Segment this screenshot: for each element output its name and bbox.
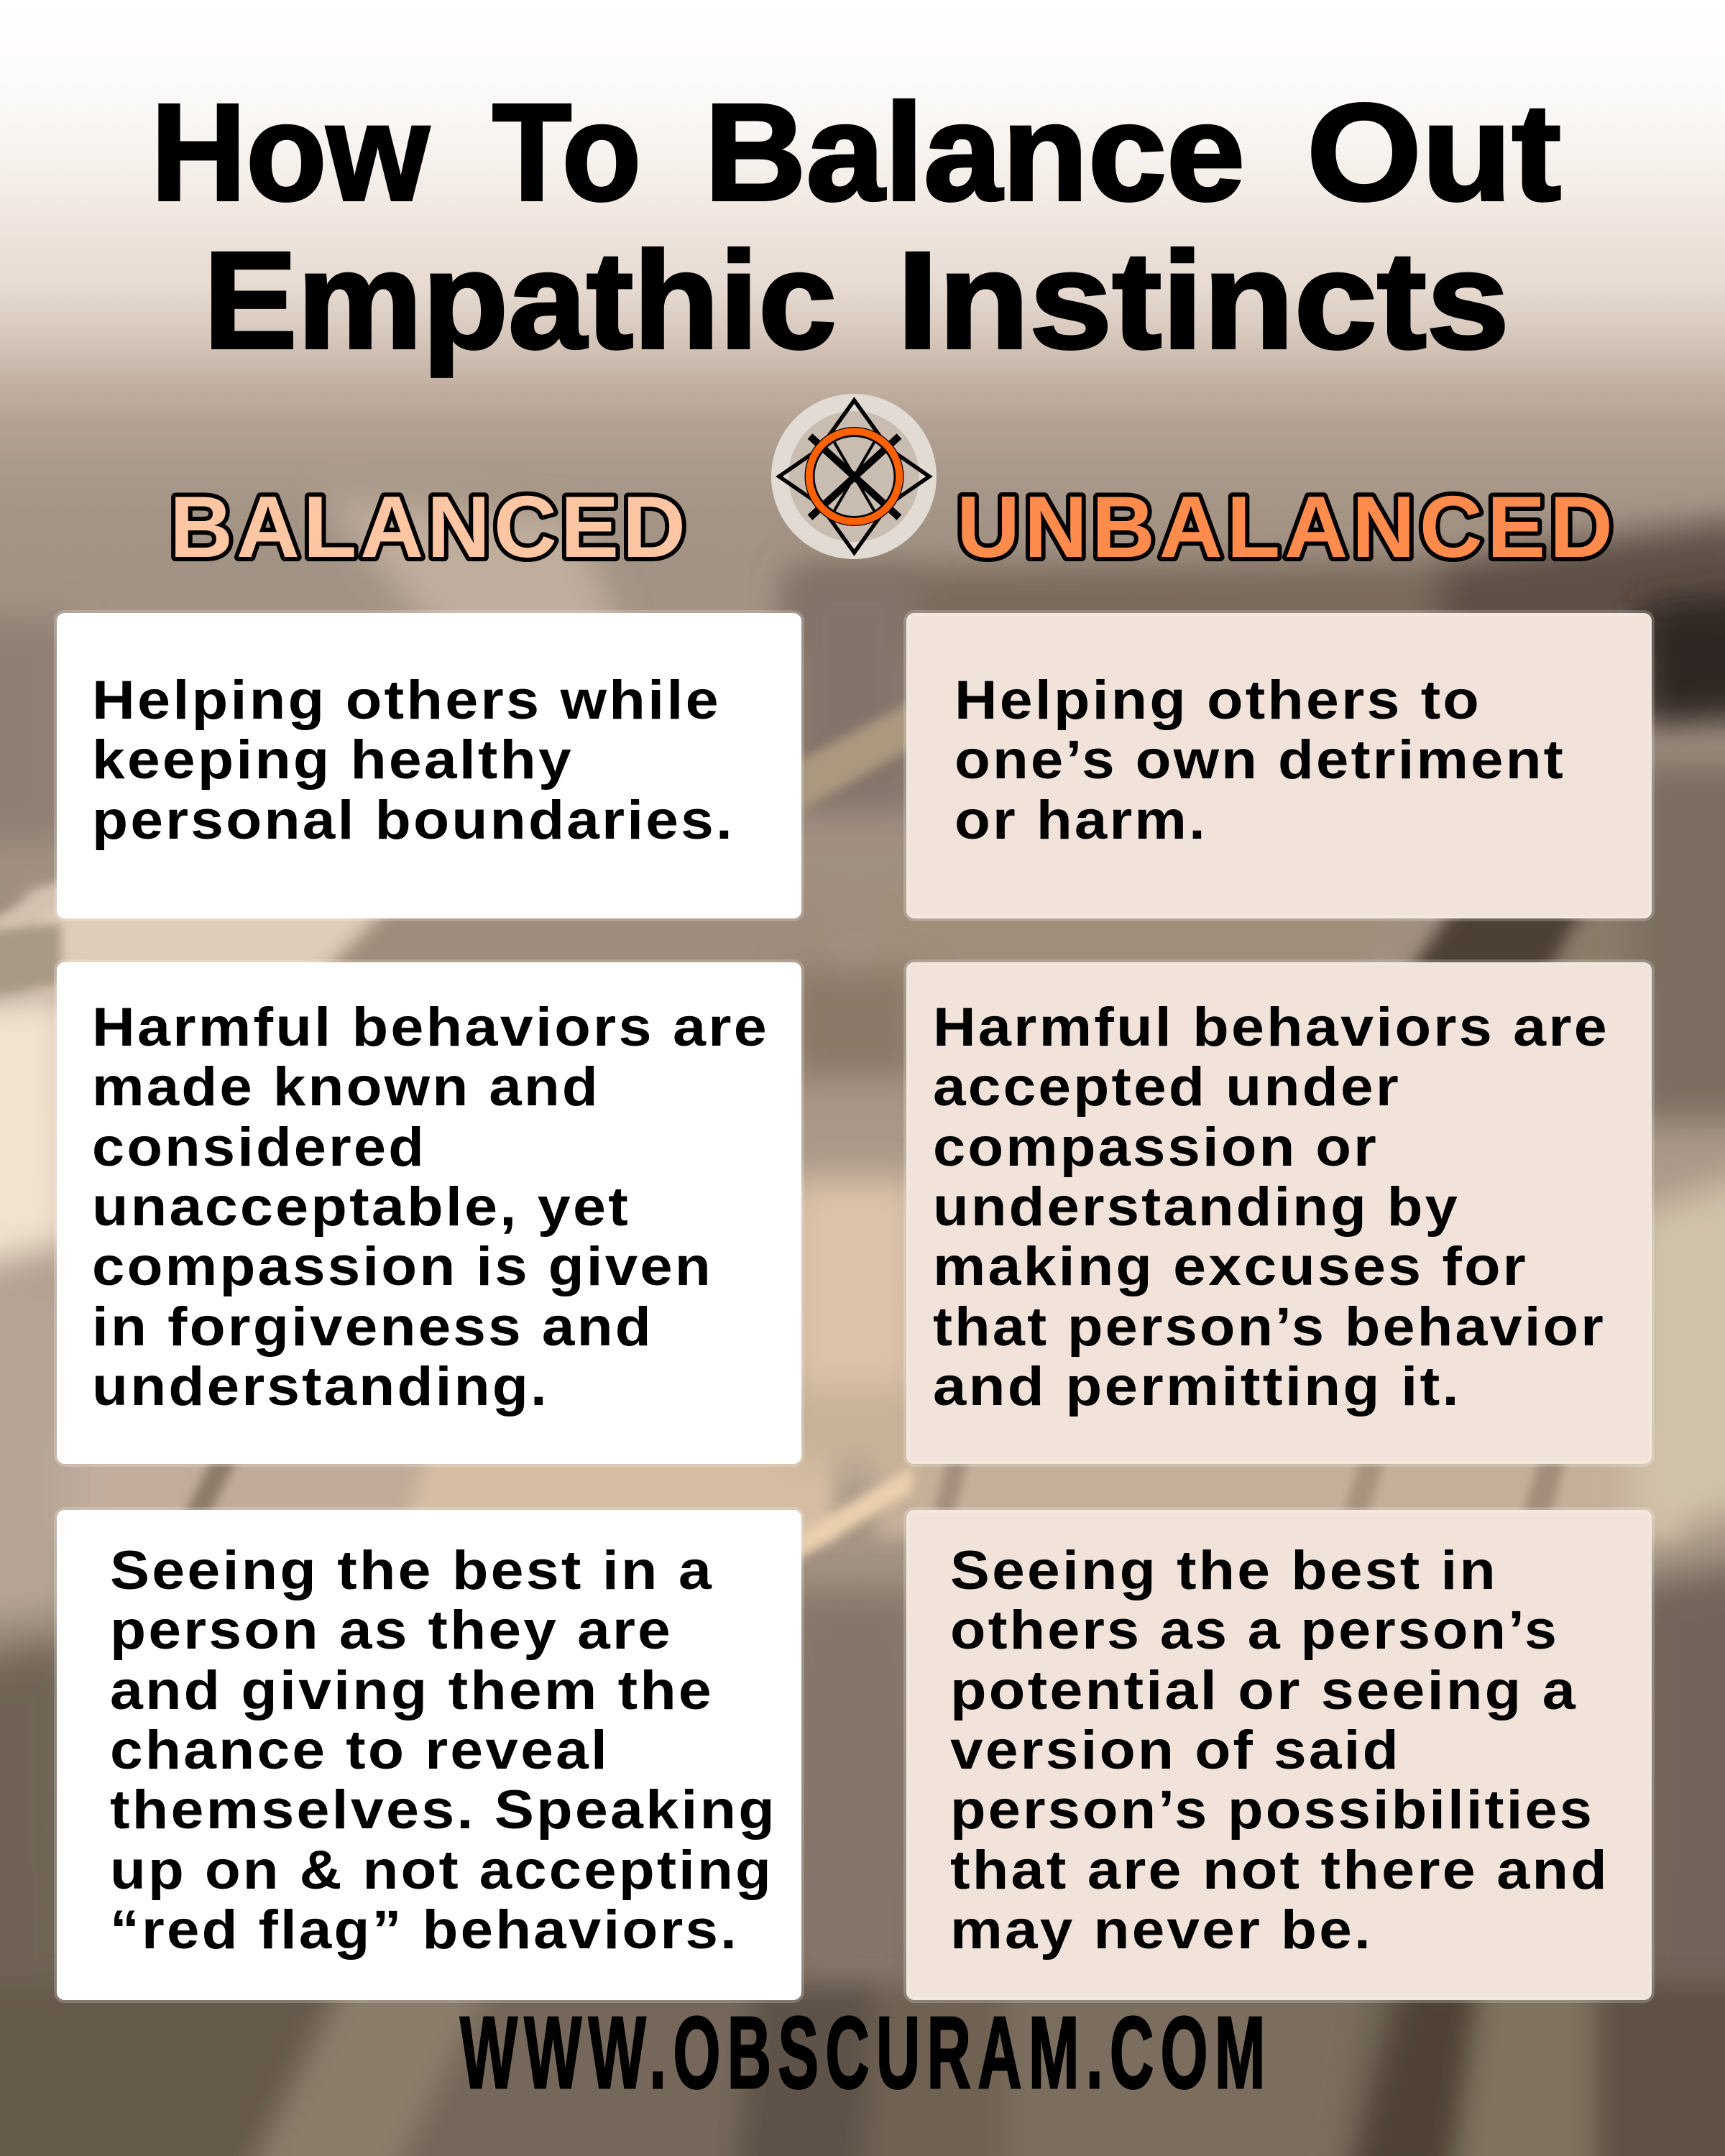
icon: compass logo <box>771 394 937 559</box>
card text: Seeing the best in a <box>110 1540 714 1601</box>
panel: unbalanced row 1 <box>906 613 1652 918</box>
card text: understanding. <box>92 1356 549 1417</box>
card text <box>92 670 735 851</box>
card text: themselves. Speaking <box>110 1779 777 1841</box>
heading: unbalanced: UNBALANCED <box>957 478 1613 576</box>
card text: may never be. <box>950 1899 1373 1961</box>
title: Out <box>1307 75 1561 229</box>
card text: unacceptable, yet <box>92 1176 630 1238</box>
card text: accepted under <box>933 1056 1401 1118</box>
card text: “red flag” behaviors. <box>110 1899 739 1961</box>
card text <box>110 1540 777 1961</box>
card text: compassion is given <box>92 1236 713 1297</box>
title: How <box>151 75 430 229</box>
card text: in forgiveness and <box>92 1296 653 1358</box>
card text: Helping others to <box>954 670 1481 731</box>
card text <box>92 997 769 1417</box>
card text: and permitting it. <box>933 1356 1461 1417</box>
card text: Seeing the best in <box>950 1540 1498 1601</box>
panel: balanced row 2 <box>57 962 801 1464</box>
card text: up on & not accepting <box>110 1840 773 1901</box>
title <box>151 75 1561 377</box>
card text: understanding by <box>933 1176 1460 1238</box>
card text: potential or seeing a <box>950 1660 1578 1721</box>
card text <box>933 997 1609 1417</box>
heading: balanced: BALANCED <box>170 478 686 576</box>
card text: personal boundaries. <box>92 790 735 851</box>
card text: one’s own detriment <box>954 729 1565 791</box>
card text <box>950 1540 1609 1961</box>
card text: compassion or <box>933 1117 1379 1178</box>
card text: person’s possibilities <box>950 1779 1594 1841</box>
panel: unbalanced row 3 <box>906 1510 1652 2000</box>
card text: version of said <box>950 1720 1401 1781</box>
card text: considered <box>92 1117 426 1178</box>
card text: making excuses for <box>933 1236 1528 1297</box>
card text: Harmful behaviors are <box>933 997 1609 1058</box>
card text: Helping others while <box>92 670 721 731</box>
panel: balanced row 1 <box>57 613 801 918</box>
card text: that person’s behavior <box>933 1296 1606 1358</box>
card text: that are not there and <box>950 1840 1609 1901</box>
card text: others as a person’s <box>950 1600 1559 1661</box>
card text: or harm. <box>954 790 1208 851</box>
panel: unbalanced row 2 <box>906 962 1652 1464</box>
title: To <box>492 75 641 229</box>
card text: person as they are <box>110 1600 673 1661</box>
card text: Harmful behaviors are <box>92 997 769 1058</box>
title: Balance <box>704 75 1245 229</box>
card text <box>954 670 1565 851</box>
card text: chance to reveal <box>110 1720 610 1781</box>
card text: made known and <box>92 1056 600 1118</box>
panel: balanced row 3 <box>57 1510 801 2000</box>
title: Instincts <box>897 223 1509 377</box>
title: Empathic <box>203 223 837 377</box>
card text: keeping healthy <box>92 729 574 791</box>
card text: and giving them the <box>110 1660 714 1721</box>
